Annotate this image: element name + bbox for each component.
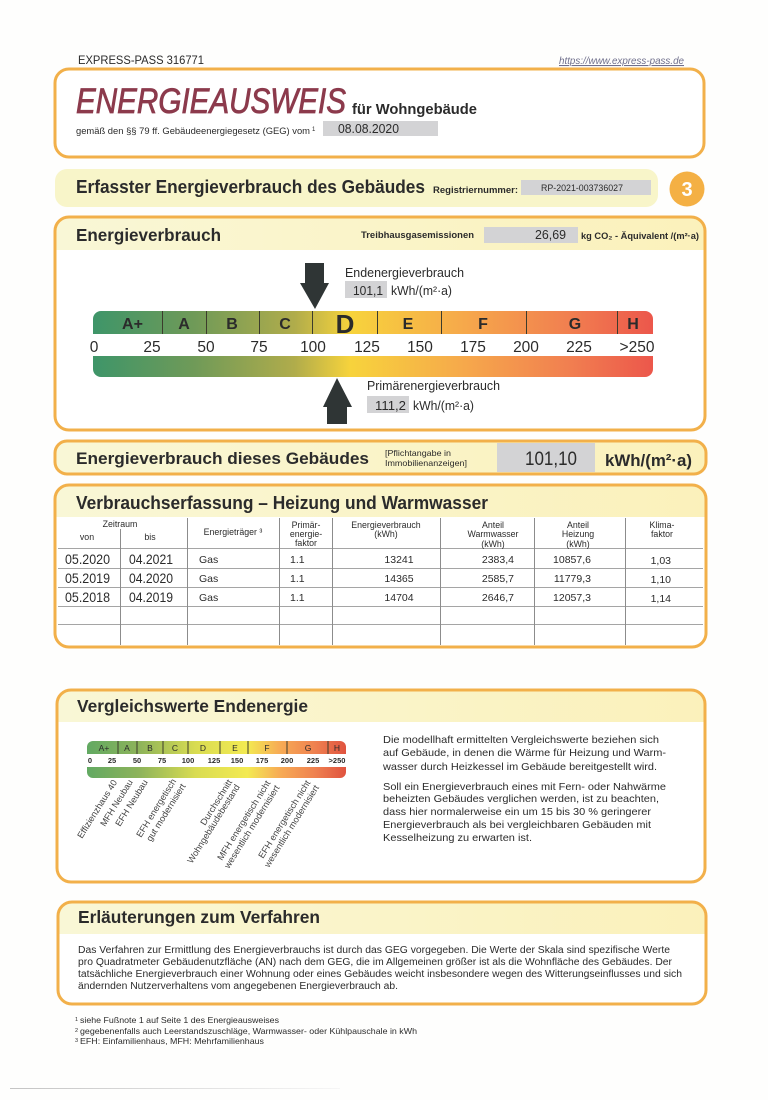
table header: Primär- [292, 520, 320, 530]
row 2020: Gas [199, 554, 218, 566]
panel: comparison values [57, 690, 705, 882]
table header: bis [144, 532, 156, 542]
small scale bar: G [305, 743, 311, 753]
scale numbers: 75 [250, 339, 268, 356]
scale numbers: 200 [513, 339, 539, 356]
row 2020: 2383,4 [482, 554, 514, 566]
row 2018: 04.2019 [129, 590, 173, 605]
row 2019 [65, 571, 671, 586]
small scale bar: H [334, 743, 340, 753]
table header: (kWh) [481, 539, 505, 549]
small scale bar: A+ [99, 743, 109, 753]
table header: (kWh) [566, 539, 590, 549]
table header: Anteil [482, 520, 504, 530]
row 2020: 1,03 [651, 555, 671, 567]
small scale numbers: 175 [256, 756, 268, 765]
row 2018: 05.2018 [65, 590, 110, 605]
small scale numbers: 0 [88, 756, 92, 765]
method text: Das Verfahren zur Ermittlung des Energieverbrauchs ist durch das GEG vorgegeben. Die Werte der Skala sind spezifische Werte [78, 945, 670, 956]
arrow: primary energy [323, 378, 352, 424]
table header: faktor [651, 529, 673, 539]
registration number [521, 180, 651, 195]
efficiency scale bar: A [178, 316, 190, 333]
row 2020 [65, 552, 671, 567]
row 2019: 04.2020 [129, 571, 173, 586]
rotated building type labels: gut modernisiert [144, 781, 188, 843]
unit: kWh/(m²·a) [605, 451, 692, 470]
section heading: Erfasster Energieverbrauch des Gebäudes [76, 176, 425, 197]
row 2019: 1,10 [651, 574, 671, 586]
website link: https://www.express-pass.de [559, 55, 684, 67]
explanation text: auf Gebäude, in denen die Wärme für Heizung und Warm- [383, 747, 667, 759]
mandatory note: Immobilienanzeigen] [385, 458, 467, 468]
footnotes: 1 [75, 1017, 78, 1023]
row 2020: 04.2021 [129, 552, 173, 567]
row 2020: 10857,6 [553, 554, 591, 566]
row 2019: 14365 [384, 573, 414, 585]
explanation text: dass hier normalerweise ein um 15 bis 30 % geringerer [383, 806, 652, 818]
panel: method explanation [58, 902, 706, 1004]
banner: recorded energy consumption [55, 169, 658, 207]
rotated building type labels [75, 777, 321, 871]
scale numbers: 150 [407, 339, 433, 356]
rotated building type labels: EFH Neubau [113, 778, 150, 828]
scale numbers: 100 [300, 339, 326, 356]
arrow: final energy [300, 263, 329, 309]
small scale numbers: 150 [231, 756, 243, 765]
method text: ändernden Nutzerverhaltens vom angegebenen Energieverbrauch ab. [78, 981, 398, 992]
panel: certificate title [55, 69, 704, 157]
row 2018: 12057,3 [553, 592, 591, 604]
row 2018: 2646,7 [482, 592, 514, 604]
panel: energy consumption [55, 217, 705, 430]
final energy value [345, 281, 452, 298]
final energy label: Endenergieverbrauch [345, 265, 464, 280]
table header: faktor [295, 538, 317, 548]
row 2019: 2585,7 [482, 573, 514, 585]
footnotes: 2 [75, 1028, 78, 1034]
scale numbers: 50 [197, 339, 215, 356]
small scale bar [87, 741, 346, 754]
emissions value [484, 227, 578, 243]
row 2020: 05.2020 [65, 552, 110, 567]
emissions label: Treibhausgasemissionen [361, 230, 474, 241]
small scale numbers: 50 [133, 756, 141, 765]
final energy value: 101,1 [353, 283, 383, 298]
table header: Anteil [567, 520, 589, 530]
efficiency scale bar: D [336, 309, 354, 339]
small scale numbers: 75 [158, 756, 166, 765]
table header: (kWh) [374, 529, 398, 539]
heading: Energieverbrauch dieses Gebäudes [76, 449, 369, 468]
footnotes: EFH: Einfamilienhaus, MFH: Mehrfamilienhaus [80, 1036, 264, 1046]
efficiency scale bar: H [627, 316, 639, 333]
row 2018: 1,14 [651, 593, 671, 605]
value: 101,10 [525, 449, 577, 470]
primary energy value [367, 396, 474, 413]
efficiency scale bar: A+ [122, 316, 143, 333]
primary energy value: kWh/(m²·a) [413, 398, 474, 413]
table header: Warmwasser [468, 529, 519, 539]
scale numbers: 125 [354, 339, 380, 356]
small scale bar: D [200, 743, 206, 753]
scale numbers: 175 [460, 339, 486, 356]
rotated building type labels: EFH energetisch nicht [256, 778, 313, 860]
small scale bar: B [147, 743, 153, 753]
rotated building type labels: wesentlich modernisiert [262, 783, 321, 870]
subtitle: für Wohngebäude [352, 101, 477, 118]
small scale bar: F [264, 743, 270, 753]
mandatory note: [Pflichtangabe in [385, 448, 451, 458]
page number badge [670, 172, 704, 206]
small scale numbers [88, 756, 345, 765]
value [497, 443, 595, 472]
table header: energie- [290, 529, 322, 539]
scale numbers: 225 [566, 339, 592, 356]
panel: certificate title: 1 [312, 127, 316, 133]
small scale numbers: 125 [208, 756, 220, 765]
rotated building type labels: Durchschnitt [198, 777, 235, 827]
method text: tatsächliche Energieverbrauch einer Wohnung oder eines Gebäudes weicht insbesondere wegen des Witterungseinflusses und sich [78, 969, 682, 980]
table grid [58, 548, 703, 624]
page number badge: 3 [681, 179, 693, 201]
date field [323, 121, 438, 136]
explanation text: Die modellhaft ermittelten Vergleichswerte beziehen sich [383, 734, 659, 746]
row 2019: 11779,3 [554, 573, 591, 585]
explanation text: Kesselheizung zu erwarten ist. [383, 832, 532, 844]
row 2019: 1.1 [290, 573, 305, 585]
registration number: RP-2021-003736027 [541, 183, 623, 193]
rotated building type labels: EFH energetisch [134, 777, 178, 839]
efficiency scale bar [93, 309, 653, 339]
footnotes: gegebenenfalls auch Leerstandszuschläge, Warmwasser- oder Kühlpauschale in kWh [80, 1026, 417, 1036]
table header: Energieverbrauch [351, 520, 421, 530]
explanation text: Energieverbrauch als bei vergleichbaren Gebäuden mit [383, 819, 651, 831]
row 2018: Gas [199, 592, 218, 604]
method text: pro Quadratmeter Gebäudenutzfläche (AN) nach dem GEG, die im Allgemeinen größer ist als die Wohnfläche des Gebäudes. Der [78, 957, 673, 968]
table header: Energieträger ³ [204, 527, 262, 537]
primary energy label: Primärenergieverbrauch [367, 378, 500, 393]
small scale numbers: 225 [307, 756, 319, 765]
page reference line: EXPRESS-PASS 316771 [78, 55, 204, 67]
table header: Heizung [562, 529, 594, 539]
rotated building type labels: Effizienzhaus 40 [75, 778, 119, 840]
explanation text [382, 734, 667, 844]
efficiency scale bar: B [226, 316, 238, 333]
small scale numbers: >250 [329, 756, 345, 765]
panel: consumption table [55, 485, 706, 647]
small scale bar: E [232, 743, 238, 753]
footnotes: siehe Fußnote 1 auf Seite 1 des Energieausweises [80, 1015, 279, 1025]
scale numbers: 25 [143, 339, 161, 356]
row 2018 [65, 590, 671, 605]
scale numbers: 0 [90, 339, 99, 356]
heading: Energieverbrauch [76, 225, 221, 245]
registration label: Registriernummer: [433, 185, 518, 196]
title: ENERGIEAUSWEIS [76, 82, 346, 121]
final energy value: kWh/(m²·a) [391, 283, 452, 298]
rotated building type labels: MFH Neubau [98, 778, 135, 828]
method text [78, 945, 682, 992]
rotated building type labels: wesentlich modernisiert [222, 783, 282, 871]
explanation text: beheizten Gebäudes verglichen werden, ist zu beachten, [383, 793, 659, 805]
efficiency scale bar: G [569, 316, 581, 333]
date field: 08.08.2020 [338, 121, 399, 136]
legal basis: gemäß den §§ 79 ff. Gebäudeenergiegesetz (GEG) vom [76, 126, 310, 137]
small scale numbers: 200 [281, 756, 293, 765]
scale numbers: >250 [620, 339, 655, 356]
small scale numbers: 100 [182, 756, 194, 765]
panel: consumption of this building [55, 441, 706, 474]
table header: von [80, 532, 94, 542]
small scale bar: C [172, 743, 178, 753]
table header: Zeitraum [103, 519, 137, 529]
row 2019: 05.2019 [65, 571, 110, 586]
explanation text: wasser durch Heizkessel im Gebäude bereitgestellt wird. [382, 761, 657, 773]
small scale bar: A [124, 743, 130, 753]
rotated building type labels: MFH energetisch nicht [215, 778, 273, 862]
footnotes [75, 1015, 417, 1046]
footnotes: 3 [75, 1038, 78, 1044]
emissions unit: kg CO₂ - Äquivalent /(m²·a) [581, 231, 699, 241]
scale numbers [90, 339, 655, 356]
row 2018: 1.1 [290, 592, 305, 604]
rotated building type labels: Wohngebäudebestand [185, 783, 242, 865]
row 2018: 14704 [384, 592, 414, 604]
mandatory note [385, 448, 467, 468]
heading: Vergleichswerte Endenergie [77, 696, 308, 716]
explanation text: Soll ein Energieverbrauch eines mit Fern- oder Nahwärme [383, 781, 666, 793]
primary energy value: 111,2 [375, 398, 406, 413]
emissions value: 26,69 [535, 227, 566, 242]
efficiency scale bar: F [478, 316, 488, 333]
small scale numbers: 25 [108, 756, 116, 765]
heading: Verbrauchserfassung – Heizung und Warmwasser [76, 493, 488, 513]
row 2020: 1.1 [290, 554, 305, 566]
row 2020: 13241 [384, 554, 414, 566]
gradient bar [93, 356, 653, 377]
table header [80, 519, 675, 549]
small gradient bar [87, 767, 346, 778]
efficiency scale bar: C [279, 316, 291, 333]
efficiency scale bar: E [403, 316, 414, 333]
row 2019: Gas [199, 573, 218, 585]
table header: Klima- [650, 520, 675, 530]
heading: Erläuterungen zum Verfahren [78, 907, 320, 927]
